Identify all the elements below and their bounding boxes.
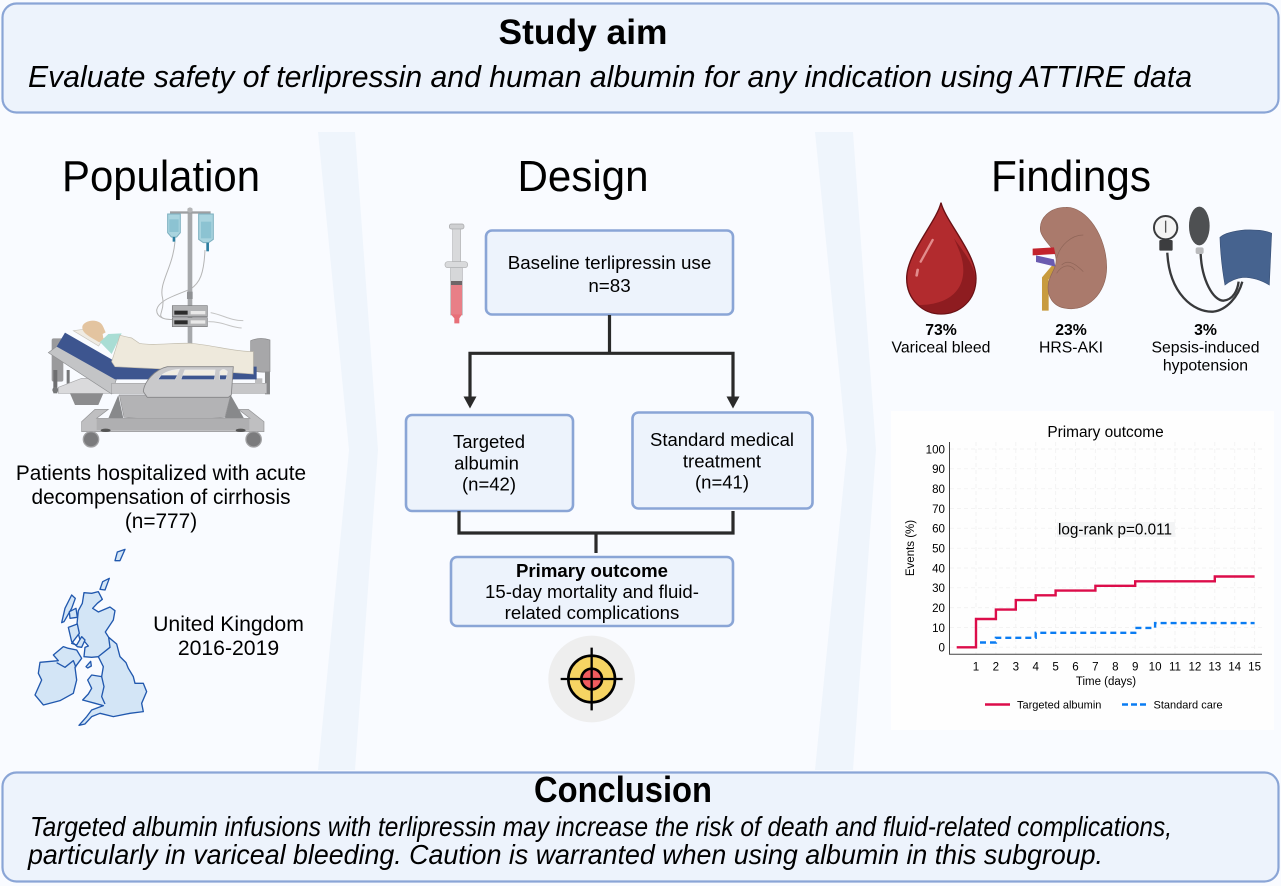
y axis tick labels: 0 <box>939 642 945 655</box>
icon: blood drop <box>907 203 976 314</box>
x axis tick labels: 14 <box>1228 660 1242 674</box>
x axis title: Time (days) <box>1076 676 1136 688</box>
x axis tick labels: 15 <box>1248 660 1261 674</box>
stat: HRS-AKI: 23% <box>1055 322 1087 339</box>
heading: population: Population <box>62 152 260 201</box>
box: baseline terlipressin use <box>486 230 733 314</box>
stat: HRS-AKI: HRS-AKI <box>1039 340 1103 357</box>
box: targeted albumin arm: (n=42) <box>462 474 516 494</box>
x axis tick labels: 7 <box>1092 660 1099 674</box>
stat: sepsis-induced hypotension <box>1151 322 1260 375</box>
chart: primary outcome cumulative events <box>891 411 1274 730</box>
box: standard medical treatment arm <box>632 412 812 508</box>
y axis tick labels: 10 <box>932 622 945 635</box>
text: location and years: 2016-2019 <box>178 637 279 660</box>
text: population description <box>16 462 306 533</box>
panel: study aim <box>2 4 1278 112</box>
stat: sepsis-induced hypotension: 3% <box>1194 322 1217 339</box>
heading: conclusion: Conclusion <box>534 769 712 810</box>
x axis tick labels: 10 <box>1149 660 1162 674</box>
panel: findings <box>891 152 1274 730</box>
stat: variceal bleed <box>892 322 990 357</box>
heading: study aim: Study aim <box>498 12 668 52</box>
legend: Targeted albumin <box>1017 700 1101 712</box>
stat: sepsis-induced hypotension: Sepsis-induced <box>1151 340 1260 357</box>
x axis tick labels: 2 <box>993 660 999 674</box>
box: baseline terlipressin use: n=83 <box>588 275 631 296</box>
text: study aim statement: Evaluate safety of terlipressin and human albumin for any indication using ATTIRE data <box>28 59 1192 94</box>
x axis tick labels: 5 <box>1052 660 1059 674</box>
y axis tick labels: 30 <box>932 582 945 595</box>
box: targeted albumin arm: albumin <box>454 452 519 474</box>
text: location and years <box>153 613 304 660</box>
icon: target <box>548 636 635 722</box>
x axis tick labels: 12 <box>1188 660 1201 674</box>
chart title: Primary outcome <box>1047 424 1164 441</box>
y axis tick labels: 70 <box>932 503 945 516</box>
x axis tick labels: 6 <box>1072 660 1079 674</box>
y axis tick labels: 40 <box>932 562 945 575</box>
connector: arms to primary outcome <box>459 511 733 553</box>
box: targeted albumin arm: Targeted <box>453 431 525 452</box>
icon: kidney <box>1033 207 1107 311</box>
icon: patient in hospital bed with IV drip <box>48 207 270 447</box>
x axis tick labels: 4 <box>1032 660 1039 674</box>
legend: Standard care <box>1154 700 1223 712</box>
x axis tick labels: 11 <box>1169 660 1181 674</box>
y axis tick labels: 50 <box>932 542 945 556</box>
annotation: log-rank p value: log-rank p=0.011 <box>1058 522 1172 538</box>
legend <box>985 700 1223 712</box>
y axis tick labels: 20 <box>932 602 945 615</box>
y axis tick labels <box>926 443 945 655</box>
box: baseline terlipressin use: Baseline terlipressin use <box>508 252 711 273</box>
text: population description: (n=777) <box>125 510 197 533</box>
box: targeted albumin arm <box>406 415 573 511</box>
box: primary outcome: 15-day mortality and fluid- <box>485 581 699 602</box>
x axis tick labels: 9 <box>1132 660 1138 674</box>
text: conclusion statement <box>27 811 1172 870</box>
icon: syringe <box>445 224 468 323</box>
x axis tick labels: 1 <box>973 660 979 674</box>
text: conclusion statement: particularly in variceal bleeding. Caution is warranted when using albumin in this subgroup. <box>27 839 1103 870</box>
box: primary outcome <box>451 557 733 626</box>
text: location and years: United Kingdom <box>153 613 304 636</box>
panel: design <box>406 152 812 722</box>
panel: population <box>16 152 306 725</box>
panel: conclusion <box>2 769 1278 882</box>
x axis tick labels <box>973 660 1261 674</box>
text: population description: Patients hospitalized with acute <box>16 462 306 485</box>
text: population description: decompensation of cirrhosis <box>32 486 290 509</box>
text: conclusion statement: Targeted albumin infusions with terlipressin may increase the risk of death and fluid-related complications, <box>30 811 1172 842</box>
line: targeted albumin <box>957 576 1255 647</box>
x axis tick labels: 8 <box>1112 660 1119 674</box>
stat: variceal bleed: Variceal bleed <box>892 340 990 357</box>
stat: sepsis-induced hypotension: hypotension <box>1163 358 1248 375</box>
y axis tick labels: 90 <box>932 463 945 476</box>
box: primary outcome: related complications <box>505 602 679 623</box>
icon: blood pressure cuff <box>1154 207 1272 312</box>
heading: findings: Findings <box>991 152 1151 201</box>
box: standard medical treatment arm: Standard medical <box>650 429 794 450</box>
box: standard medical treatment arm: treatment <box>683 450 761 472</box>
arrow: split into treatment arms <box>464 315 740 408</box>
box: primary outcome: Primary outcome <box>516 560 668 581</box>
x axis tick labels: 3 <box>1013 660 1019 674</box>
y axis tick labels: 60 <box>932 523 945 536</box>
stat: variceal bleed: 73% <box>925 322 957 339</box>
line: standard care <box>980 623 1255 642</box>
y axis title: Events (%) <box>905 520 917 576</box>
heading: design: Design <box>518 152 648 201</box>
x axis tick labels: 13 <box>1208 660 1221 674</box>
box: standard medical treatment arm: (n=41) <box>695 472 749 492</box>
y axis tick labels: 80 <box>932 483 945 496</box>
y axis tick labels: 100 <box>926 443 945 456</box>
stat: HRS-AKI <box>1039 322 1103 357</box>
icon: map of United Kingdom and Ireland <box>35 549 147 725</box>
